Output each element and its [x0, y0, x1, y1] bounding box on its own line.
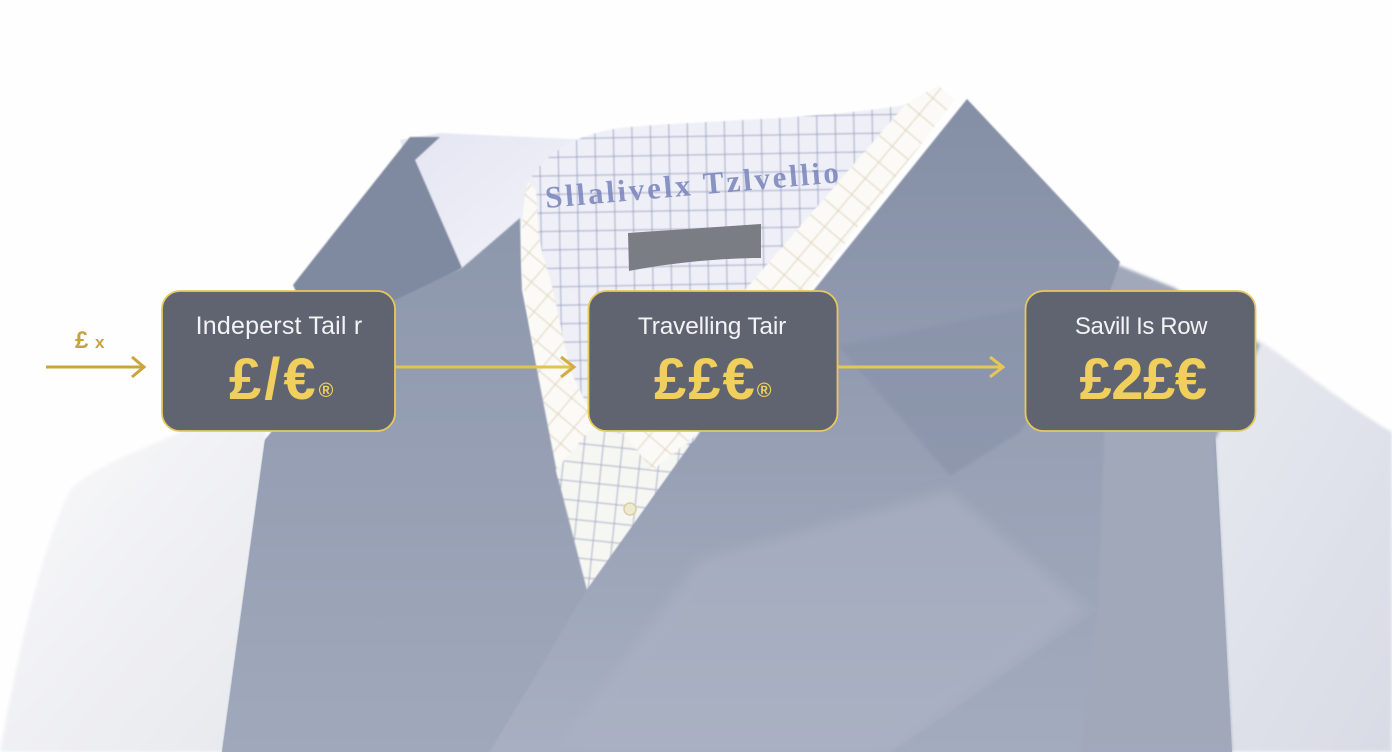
shirt collar inner check	[525, 100, 930, 480]
arrow: entry to independent tailor	[46, 357, 144, 377]
jacket right shoulder	[1080, 262, 1260, 752]
shirt collar right band	[622, 85, 955, 470]
panel: travelling tailor	[588, 291, 838, 431]
heading: independent tailor: Indeperst Tail r	[196, 312, 362, 340]
jacket left lapel	[222, 218, 587, 752]
price: Savile Row: £2£€	[1079, 347, 1207, 412]
shirt sleeve: left	[0, 398, 300, 752]
arrow: travelling tailor to Savile Row	[838, 357, 1003, 377]
panel: independent tailor	[162, 291, 395, 431]
jacket right lapel	[490, 99, 1120, 752]
lapel notch shading	[838, 292, 1110, 476]
shirt sleeve: right	[1110, 262, 1392, 752]
arrow: independent tailor to travelling tailor	[395, 357, 574, 377]
price: travelling tailor: ££€	[654, 347, 757, 412]
collar woven label text: Sllalivelx Tzlvellio	[544, 154, 843, 215]
heading: travelling tailor: Travelling Tair	[638, 313, 786, 340]
jacket body	[222, 300, 1232, 752]
shirt button	[624, 503, 636, 515]
heading: Savile Row: Savill Is Row	[1075, 313, 1208, 340]
price: independent tailor: £/€	[229, 347, 319, 412]
panel: Savile Row	[1026, 291, 1256, 431]
price: travelling tailor: ®	[757, 380, 772, 402]
shirt back panel	[400, 133, 595, 290]
entry label: £ x	[75, 327, 105, 354]
shirt collar left band	[521, 182, 602, 483]
lower lapel highlight	[560, 490, 1085, 745]
collar tag	[628, 224, 761, 271]
jacket left collar	[293, 137, 462, 310]
shirt placket with button	[556, 430, 690, 590]
price: independent tailor: ®	[319, 380, 334, 402]
